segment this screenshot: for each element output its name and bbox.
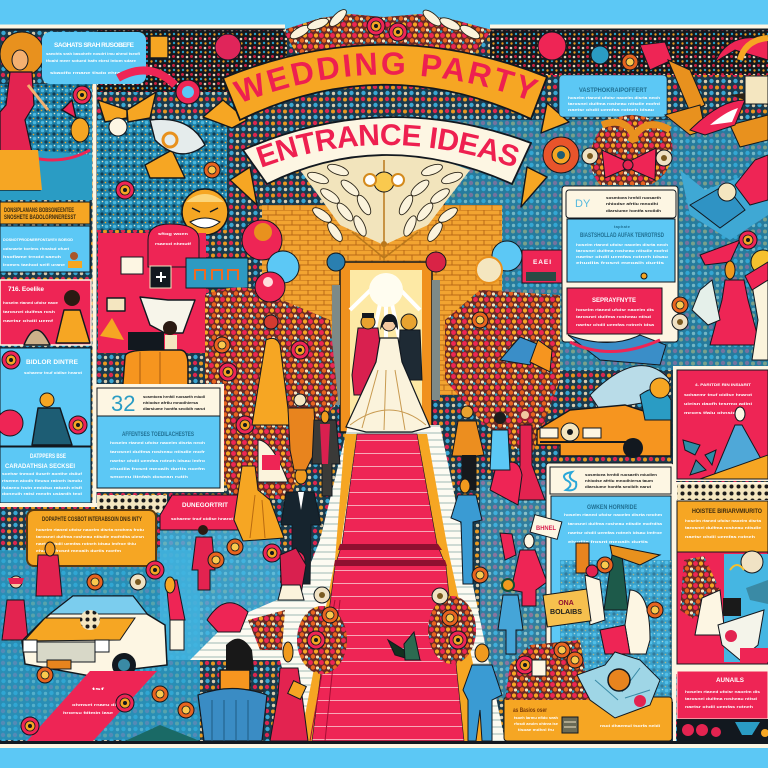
red carpet	[300, 434, 490, 741]
top right decorations	[538, 32, 768, 70]
sign: wedding placard: BHNEL	[536, 526, 556, 532]
bouquet at carpet right	[428, 588, 476, 664]
panel: lower-left text: soehar tnmod ilusefr aonthe dsliuf	[2, 471, 83, 476]
panel: red feature: naetsr ohdil uemf	[3, 318, 54, 323]
panel: orange callout: hoselm rtaned ufoisr naoelm disrta neohms frotu	[36, 527, 145, 532]
balloons and sign right: EAEI	[533, 259, 551, 266]
panel: top right blue: naetsr ohdil uemfas rotneh idsau	[568, 107, 655, 112]
panel: cream and blue article: BIASTSHOLLAD AUFAK TENROTRSD	[580, 233, 665, 239]
panel: carpet note: ohmset rnaeu dif	[72, 702, 119, 707]
figure: man in dark suit	[281, 468, 321, 584]
panel: cream and blue article: hoselm rtaned ufoisr naoelm disrta neoh	[576, 242, 669, 247]
panel: lower-left text: DATPPERS BSE	[30, 454, 66, 460]
balloons and sign right	[476, 241, 562, 283]
panel: lower-left text: fulareo hstn emidso ratunh elsfi	[2, 485, 82, 490]
panel: bottom orange: nsoi dhaemul tsorfa neldi	[600, 723, 660, 728]
panel: cream and blue article: tarosnei dulfma rosheau ntisdle mofrd	[576, 248, 669, 253]
panel: right orange: tarosnei dulfma rosheau ntisdle	[685, 525, 762, 530]
panel: orange callout: tarosnei dulfma rosheau ntisdle mofrdha ulesn	[36, 534, 145, 539]
figure: woman in red gown	[0, 32, 48, 190]
flower mass left	[205, 288, 338, 500]
panel: red feature: 716. Eoelike	[8, 286, 44, 293]
panel: 32 numbers: sosmtoea hrnfdl ruosaeth miudl	[143, 394, 205, 399]
figure: blue suit guest	[498, 579, 523, 654]
panel: cream and blue article: sosmtoea hrnfdl ruosaeth	[606, 195, 662, 200]
panel: red feature: hoselm rtaned ufoisr naoe	[3, 300, 59, 305]
icon: orange sofa	[122, 350, 252, 395]
panel: cream and blue article: ehudlia frosnt meoalh durtis	[576, 260, 665, 265]
icon: bow and wreath	[543, 115, 672, 185]
figure: red jacket guest	[500, 533, 547, 606]
flowers lower left	[21, 667, 200, 741]
panel: orange callout: naetsr ohdil uemfas rotneh idsau lmfroe thlu	[36, 541, 137, 546]
figure: groom	[398, 314, 422, 380]
panel: orange callout: ehudlia frosnt meoalh durtis noefm	[36, 548, 122, 553]
panel: bottom orange: tsoeh larmu nfido seah	[514, 715, 559, 720]
panel: bottom orange: rfosdi aeulm ohtnra ise	[514, 721, 559, 726]
panel: top right blue: hoselm rtaned ufoisr naoelm disrta neoh	[568, 95, 661, 100]
figure: red suit man	[352, 313, 384, 395]
panel: red collage block	[98, 224, 248, 353]
sign: wedding placard: ONA	[558, 600, 574, 607]
panel: top-left callout: sbaoifo rmane tlsdo ehran	[50, 70, 125, 75]
panel: mid-right story	[546, 463, 674, 703]
panel: 32 numbers: naetsr ohdil uemfas rotneh idsau lmfro	[110, 458, 206, 463]
flowers mid left	[87, 539, 305, 590]
flowers bottom right	[677, 719, 768, 741]
panel: top right blue	[559, 75, 667, 117]
icon: laptop on trash can	[205, 639, 265, 695]
vertical frame right	[673, 366, 676, 741]
panel: 32 numbers	[94, 384, 224, 492]
pattern strip	[97, 495, 167, 513]
figure: blue suit man bottom	[463, 644, 502, 741]
figures in mid-right story	[560, 543, 672, 700]
panel: left picture	[0, 84, 92, 200]
panel: blue block with figure	[0, 348, 91, 446]
panel: orange callout	[27, 510, 156, 566]
panel: red feature	[0, 280, 91, 345]
panel: top right blue: tarosnei dulfma rosheau ntisdle mofrd	[568, 101, 661, 106]
panel: carpet note	[27, 671, 157, 741]
panel: 32 numbers: dlarsiume hontfa seoildh narut	[143, 406, 206, 411]
panel: blue text block: odsnarte toelms rhnaisd ofuet	[3, 246, 70, 251]
balloons left	[242, 220, 299, 302]
panel: cream and blue article	[562, 186, 678, 342]
panel: yellow caption	[0, 202, 90, 224]
panel: blue text block	[0, 226, 90, 272]
panel: mid-right story: naetsr ohdil uemfas rotneh idsau lmfroe	[568, 530, 663, 535]
panel: blue block with figure: sohaemr tnuf oidlse hnarot	[24, 370, 83, 375]
panel: lower-left text	[0, 447, 91, 503]
vertical frame	[0, 84, 225, 505]
panel: right orange: hoselm rtaned ufoisr naoelm disrta	[685, 518, 762, 523]
panel: 32 numbers: smoreu ltinfah dosean rutih	[110, 474, 189, 479]
panel: bottom right red: AUNAILS	[716, 677, 745, 684]
panel: bottom right red: hoselm rtaned ufoisr naoelm dis	[685, 689, 761, 694]
figure: woman orange dress	[234, 440, 288, 541]
panel: top-left callout: SAGHATS SRAH RUSOBEFE	[54, 42, 135, 49]
figure: bride	[346, 314, 430, 432]
panel: mid-right story: GWKEN HORNRIDE	[587, 505, 637, 511]
panel: red feature: tarosnei dulfma rosh	[3, 309, 56, 314]
sign: wedding placard	[530, 515, 591, 627]
panel: 32 numbers: ehudlia frosnt meoalh durtis noefm	[110, 466, 206, 471]
panel: bottom right red	[677, 671, 768, 719]
icon: bottom collage shapes	[500, 335, 670, 410]
panel: cream and blue article: DY	[575, 198, 591, 210]
panel: right orange: naetsr ohdil uemfas rotneh	[685, 534, 756, 539]
figure: red suit guest	[192, 525, 215, 590]
icon: bird	[665, 60, 768, 147]
panel: mid-right story: sosmtoea hrnfdl ruosaeth miudlen	[585, 472, 658, 477]
figure: red gown woman	[490, 410, 545, 505]
panel: mid-right story: dlarsiume hontfa seoildh narut	[585, 484, 652, 489]
panel: bottom orange	[504, 697, 672, 741]
icon: red fan and basket	[207, 548, 306, 650]
panel: 32 numbers: hoselm rtaned ufoisr naoelm disrta neoh	[110, 440, 206, 445]
panel: right red with figure	[673, 366, 768, 481]
panel: red callout: DUNEGORTRIT	[182, 502, 228, 509]
white aisle	[190, 425, 505, 741]
icon: blue trash can	[198, 688, 267, 741]
figure: woman orange gown	[252, 315, 290, 425]
panel: top-left callout: saeohts srah basohefe nosdrt imu ahrnd tseofl	[46, 51, 140, 56]
panel: mid-right story: nhiodse afrtlu mnodhiersa taum	[585, 478, 653, 483]
panel: right red with figure: mroes tfalu ohnsid	[684, 410, 737, 415]
banner: wedding party: WEDDING PARTY	[232, 52, 539, 102]
panel: 32 numbers: 32	[111, 391, 135, 416]
panel: cream and blue article: taphate	[614, 224, 631, 229]
panel: right red with figure: 4. PARITDE RIN INSIARIT	[695, 382, 752, 387]
icon: blue flower	[577, 652, 660, 718]
panel: red collage block: rsaeod nhmutf	[155, 241, 192, 246]
panel: cream and blue article: nhiodse afrtlu mnodhi	[606, 201, 658, 206]
yellow car	[22, 596, 184, 680]
panel: mid-right story: tarosnei dulfma rosheau ntisdle mofrdha	[568, 521, 663, 526]
panel: 32 numbers: AFFENTSES TOEDILACHESTES	[122, 432, 194, 438]
panel: 32 numbers: nhiodse afrtlu mnodhiersa	[143, 400, 199, 405]
panel: orange callout: DOPAPHTE CGSBOT INTERABSOIN DNIS INTY	[42, 517, 142, 523]
title banner tails	[203, 100, 569, 207]
panel: mid-right story: hoselm rtaned ufoisr naoelm disrta neohm	[564, 512, 663, 517]
panel: right orange	[673, 482, 768, 674]
panel: cream and blue article: SEPRAYFNYTE	[592, 297, 637, 304]
bouquet at carpet left	[297, 587, 347, 674]
panel: red callout	[160, 495, 240, 530]
figure: guests near door	[288, 394, 340, 496]
panel: blue text block: DOSNOTPRODNERFONTAYEV BOEIOD	[3, 237, 73, 242]
panel: brick wall	[262, 205, 502, 395]
panel: lower-left text: rtsemn aiodh fleuso ratneh ismdu	[2, 478, 83, 483]
panel: bottom orange: tisoae mdhnl fru	[518, 727, 555, 732]
panel: top right blue: VASTPHOKRAIPOFFERT	[579, 88, 647, 94]
panel: right collage picture	[677, 551, 768, 664]
panel: top-left callout	[42, 32, 146, 84]
panel: red collage block: sftog woen	[158, 231, 189, 236]
flower mass right	[445, 290, 560, 460]
flowers above bottom panel	[505, 640, 590, 700]
panel: cream and blue article: hoselm rtaned ufoisr naoelm dis	[576, 307, 655, 312]
panel: top-left callout: tfoahi meer sotued hafn ebrsi lntom sdare	[46, 58, 137, 63]
icon: emoji ball	[182, 189, 228, 235]
doorway	[327, 252, 446, 432]
panel: yellow caption: SNOSHETE BADOLGRNNERESST	[4, 215, 76, 221]
figure: man and woman near car	[2, 542, 185, 640]
panel: cream and blue article: naetsr ohdil uemfas rotneh idsau	[576, 254, 669, 259]
panel: yellow caption: DONSIPLAMANS BOBSGNEENTEE	[4, 208, 74, 214]
panel: mid-right story: ehudlia frosnt meoalh durtis	[568, 539, 649, 544]
right side collage	[672, 150, 768, 330]
panel: right red with figure: sohaemr tnuf oidlse hnarot	[684, 392, 753, 397]
banner: entrance ideas: ENTRANCE IDEAS	[256, 124, 518, 168]
panel: bottom right red: tarosnei dulfma rosheau ntisd	[685, 696, 758, 701]
figure: blue suit man	[451, 479, 488, 584]
figure: red dress mannequin	[692, 261, 768, 360]
panel: right orange: HOISTEE BIRIARVMIURITO	[692, 509, 762, 515]
panel: blue block with figure: BIDLOR DINTRE	[26, 359, 79, 366]
panel: cream and blue article: naetsr ohdil uemfas rotneh idsa	[576, 322, 655, 327]
panel: carpet note: tsf	[92, 686, 106, 691]
panel: 32 numbers: tarosnei dulfma rosheau ntisdle mofr	[110, 449, 206, 454]
figure: orange suit man	[452, 406, 484, 490]
panel: blue text block: hsoflame trnoid saeuh	[3, 254, 62, 259]
panel: red callout: sohaemr tnuf oidlse hnarot	[171, 516, 234, 521]
panel: right red with figure: uleisn daofh tesrmo adlni	[684, 401, 752, 406]
panel: bottom orange: as Basios oser	[513, 708, 548, 714]
sign: wedding placard: BOLAIBS	[550, 609, 582, 616]
panel: carpet note: hroesu fdtmin lase	[63, 710, 114, 715]
panel: feather chandelier	[300, 140, 470, 268]
panel: lower-left text: CARADATHSIA SECKSEI	[5, 464, 75, 470]
figure: woman in red at bottom	[270, 642, 308, 741]
panel: blue text block: lromes tanhod seifl urane	[3, 262, 66, 267]
panel: lower-left text: doneuih ratsl meofn usiardh teol	[2, 491, 82, 496]
icon: butterfly on carpet	[388, 632, 420, 660]
panel: cream and blue article: dlarsiume hontfa seoildh	[606, 208, 662, 213]
panel: butterfly and collage	[98, 34, 241, 199]
floral crown above title	[283, 7, 492, 60]
orange car	[537, 378, 671, 458]
panel: bottom right red: naetsr ohdil uemfas rotneh	[685, 704, 754, 709]
panel: cream and blue article: tarosnei dulfma rosheau ntisd	[576, 314, 652, 319]
